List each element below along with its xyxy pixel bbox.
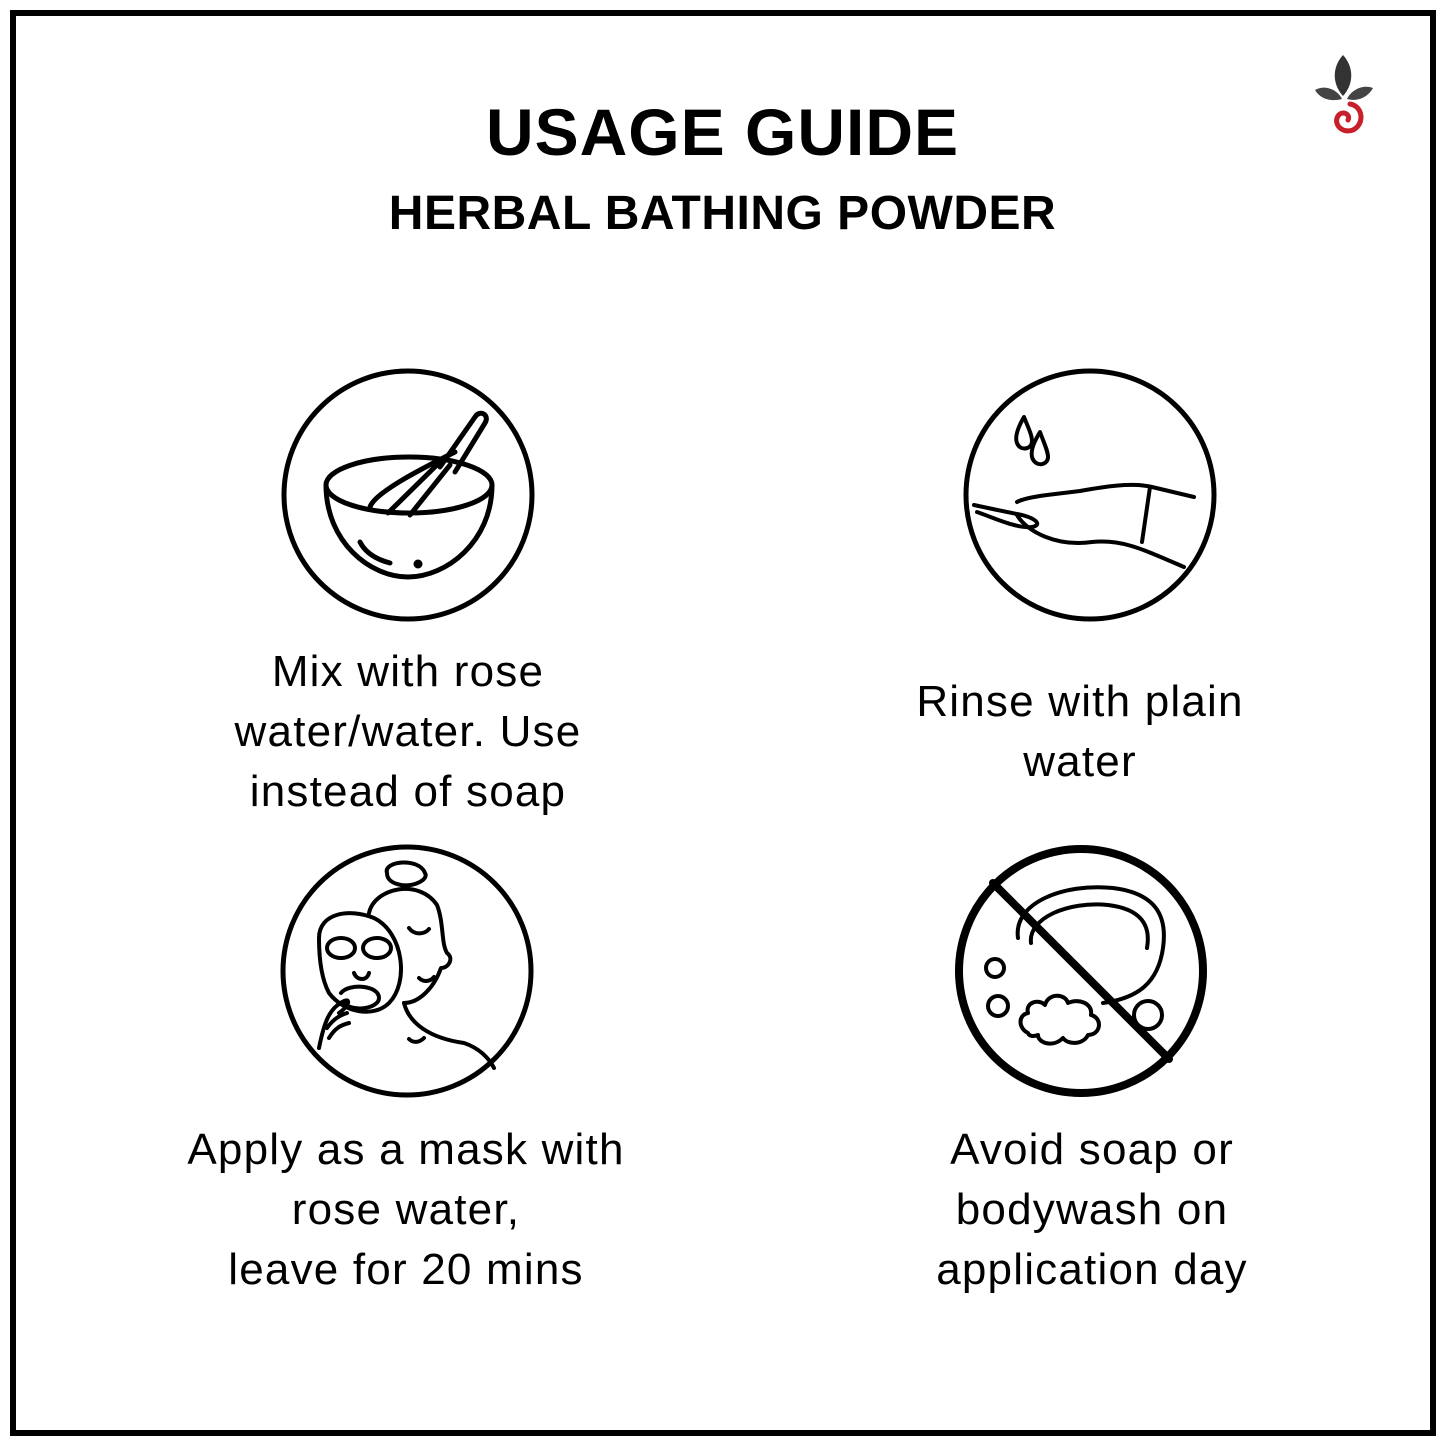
text: mix: instead of soap xyxy=(250,767,566,816)
icon: mixing bowl xyxy=(282,368,534,622)
text: rinse xyxy=(916,677,1244,786)
text: mask: Apply as a mask with xyxy=(187,1125,625,1174)
logo xyxy=(1315,55,1373,134)
icon: face mask xyxy=(280,844,534,1098)
icon: hand with drops xyxy=(964,368,1216,622)
text: mask: rose water, xyxy=(292,1185,520,1234)
text: avoid: Avoid soap or xyxy=(950,1125,1234,1174)
title: USAGE GUIDE xyxy=(486,95,959,169)
icon: no soap xyxy=(955,845,1207,1097)
text: mix: Mix with rose xyxy=(272,647,544,696)
text: mask: leave for 20 mins xyxy=(228,1245,584,1294)
text: rinse: Rinse with plain xyxy=(916,677,1244,726)
text: mix xyxy=(234,647,581,816)
text: avoid xyxy=(936,1125,1248,1294)
text: avoid: bodywash on xyxy=(956,1185,1228,1234)
text: mask xyxy=(187,1125,625,1294)
subtitle: HERBAL BATHING POWDER xyxy=(389,187,1056,240)
text: mix: water/water. Use xyxy=(235,707,581,756)
text: rinse: water xyxy=(1023,737,1137,786)
text: avoid: application day xyxy=(936,1245,1248,1294)
